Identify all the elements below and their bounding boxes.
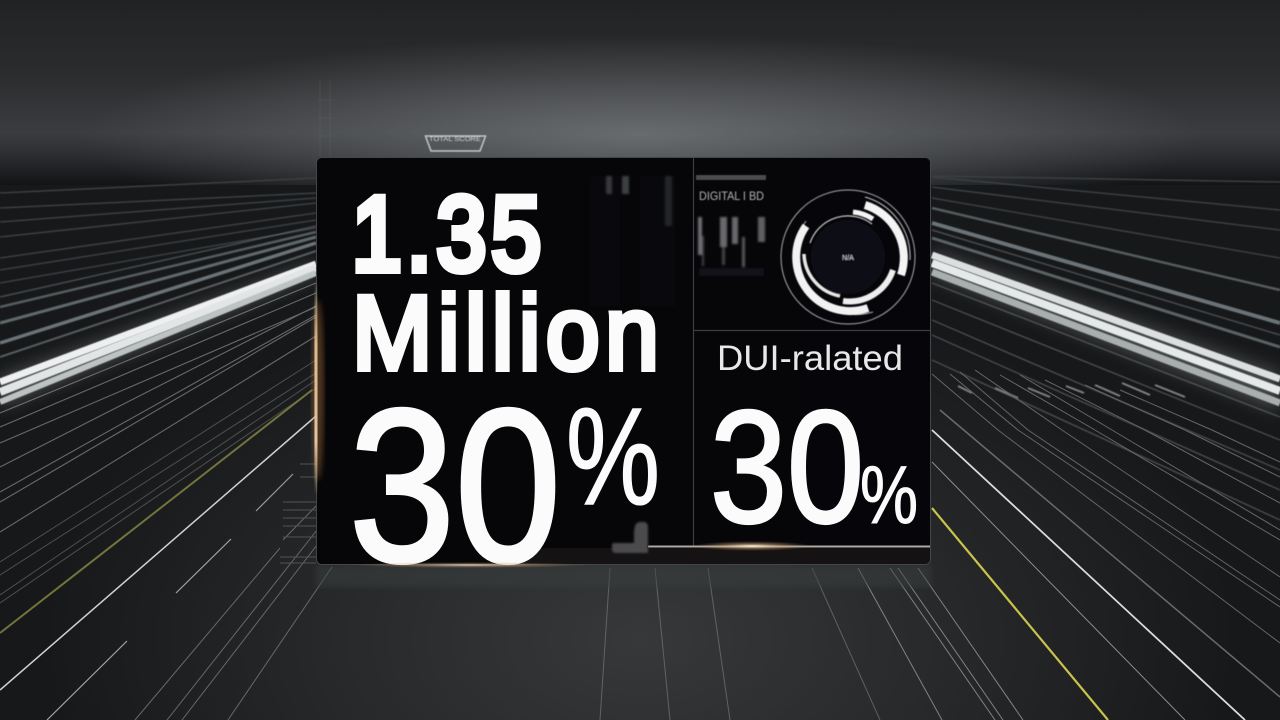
panel edge glow [312, 280, 930, 568]
small horizontal ticks beside panel [280, 464, 316, 563]
label: DUI-ralated: DUI-ralated [717, 339, 903, 378]
widget title: DIGITAL I BD [699, 189, 764, 203]
small trapezoid label tag [426, 136, 486, 151]
stat: small 30: 30 [710, 377, 864, 556]
bright beam right [932, 250, 1280, 412]
stat: small percent sign: % [860, 450, 918, 541]
bright beam left [0, 262, 316, 408]
faint ghost column above panel [318, 80, 334, 156]
bottom accent line with flare [612, 522, 930, 553]
mini bar chart widget [696, 175, 766, 276]
gauge centre label: N/A [842, 255, 854, 262]
light streaks left upper band [0, 178, 316, 357]
left white lane line [0, 416, 316, 690]
background: road surface [0, 170, 1280, 720]
stat: 1.35: 1.35 [352, 175, 546, 293]
right white lane line [932, 430, 1245, 720]
gauge centre disc [811, 220, 885, 294]
left yellow lane line [0, 390, 312, 633]
panel lower band [500, 548, 930, 564]
gauge thin rings [781, 190, 915, 324]
small trapezoid label tag: TOTAL SCORE [429, 137, 481, 143]
below-panel light band [316, 565, 931, 587]
gauge white arcs [865, 205, 904, 275]
stat: large 30: 30 [349, 365, 561, 608]
stat: large percent sign: % [566, 380, 660, 534]
faint vertical bars in left panel [590, 176, 675, 306]
light streaks right upper band [932, 176, 1280, 347]
right yellow lane line [932, 508, 1108, 720]
main dark panel [316, 158, 930, 564]
dashes right [958, 383, 1185, 398]
widget bars [698, 217, 765, 276]
circular gauge [781, 190, 915, 324]
light streaks left lower band [0, 283, 332, 720]
stat: Million: Million [352, 275, 664, 392]
widget header bar [696, 175, 766, 180]
background: dark sky [0, 0, 1280, 185]
panel dividers [694, 158, 930, 546]
light streaks right lower band [600, 283, 1280, 720]
panel background [316, 158, 930, 564]
